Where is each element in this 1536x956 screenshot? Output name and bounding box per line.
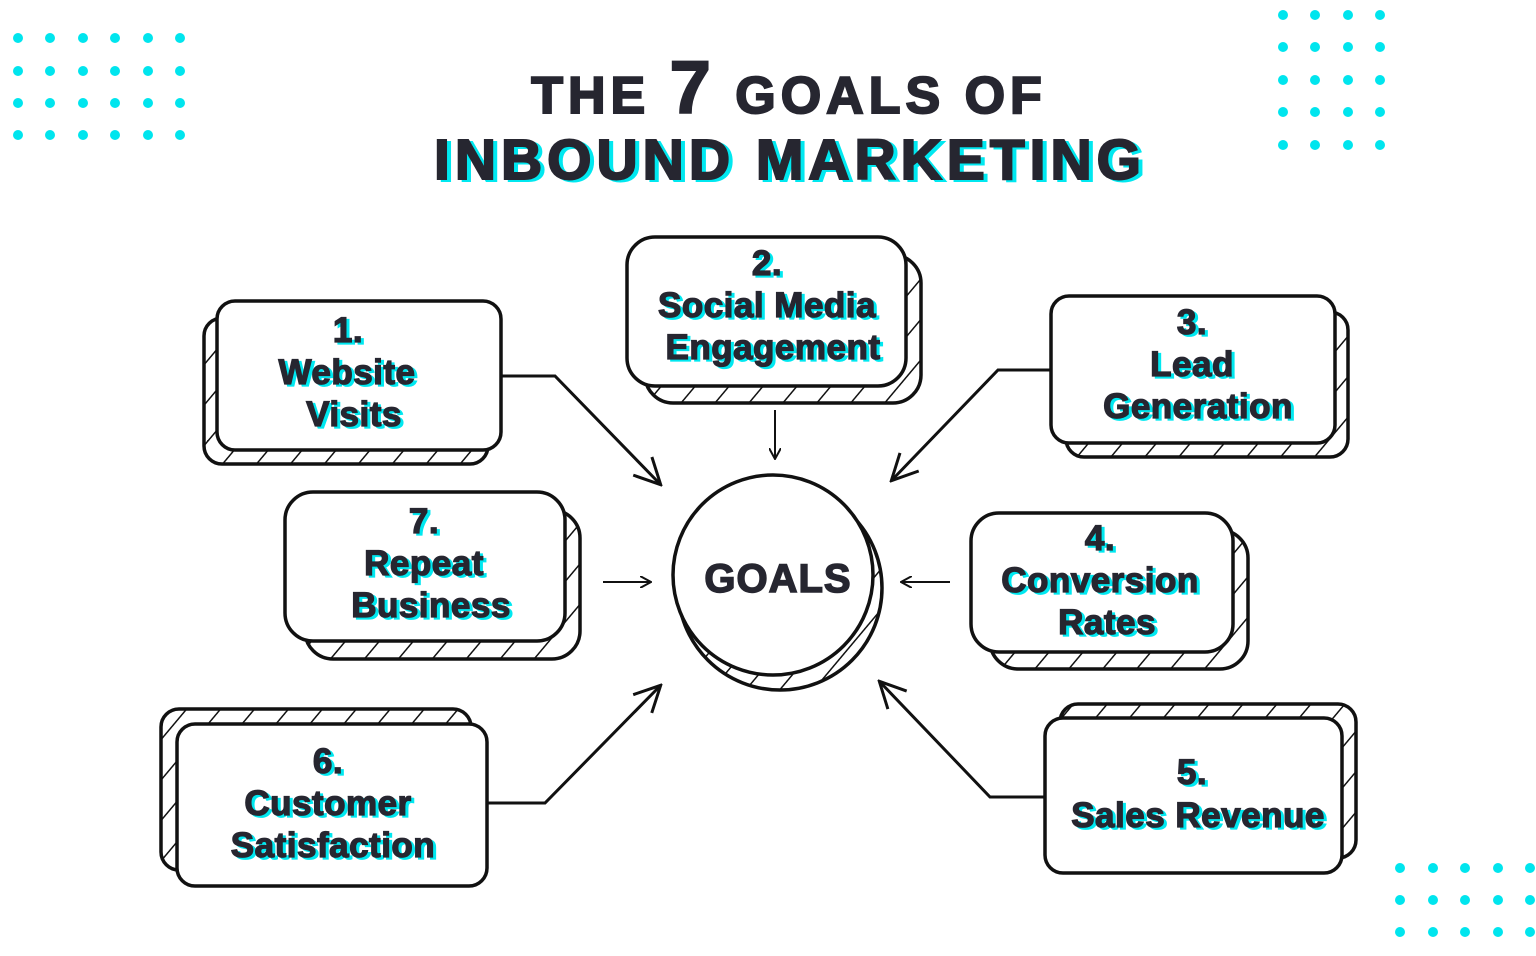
box 1: Website Visits: 1. — [336, 313, 366, 352]
box 7: Repeat Business — [285, 492, 580, 659]
box 2: Social Media Engagement: Social Media — [658, 286, 876, 325]
box 2: Social Media Engagement — [627, 237, 921, 403]
title: INBOUND MARKETING — [438, 130, 1150, 194]
box 5: Sales Revenue: Sales Revenue — [1074, 798, 1328, 837]
center circle: GOALS: GOALS — [704, 557, 852, 601]
dots: top-left — [13, 33, 185, 140]
box 3: Lead Generation: Generation — [1106, 389, 1296, 428]
box 5: Sales Revenue — [1045, 704, 1356, 873]
box 3: Lead Generation — [1051, 296, 1348, 457]
box 1: Website Visits: Visits — [306, 395, 402, 434]
box 6: Customer Satisfaction: Customer — [247, 786, 415, 825]
box 2: Social Media Engagement: Engagement — [665, 328, 881, 367]
box 3: Lead Generation: 3. — [1177, 303, 1207, 342]
box 4: Conversion Rates — [971, 513, 1248, 669]
box 1: Website Visits: Visits — [309, 397, 405, 436]
box 7: Repeat Business: Repeat — [364, 544, 484, 583]
box 6: Customer Satisfaction: 6. — [313, 742, 343, 781]
title — [434, 46, 1150, 194]
box 5: Sales Revenue: 5. — [1180, 755, 1210, 794]
box 7: Repeat Business: 7. — [412, 504, 442, 543]
title: THE 7 GOALS OF — [531, 46, 1047, 129]
box 7: Repeat Business: Business — [351, 586, 511, 625]
box 4: Conversion Rates: Rates — [1058, 603, 1156, 642]
box 3: Lead Generation: Lead — [1150, 345, 1234, 384]
box 6: Customer Satisfaction: Satisfaction — [231, 826, 435, 865]
box 1: Website Visits: Website — [278, 353, 416, 392]
dots: bottom-right — [1395, 863, 1535, 937]
box 1: Website Visits: Website — [281, 355, 419, 394]
box 4: Conversion Rates: 4. — [1088, 521, 1118, 560]
box 3: Lead Generation: Lead — [1153, 347, 1237, 386]
box 4: Conversion Rates: Conversion — [1001, 561, 1199, 600]
box 7: Repeat Business: Repeat — [367, 546, 487, 585]
arrows — [487, 370, 1051, 803]
box 6: Customer Satisfaction: 6. — [316, 744, 346, 783]
box 6: Customer Satisfaction: Satisfaction — [234, 828, 438, 867]
box 5: Sales Revenue: 5. — [1177, 753, 1207, 792]
box 7: Repeat Business: Business — [354, 588, 514, 627]
box 2: Social Media Engagement: 2. — [755, 246, 785, 285]
box 1: Website Visits: 1. — [333, 311, 363, 350]
dots: top-right — [1278, 10, 1385, 150]
box 1: Website Visits — [204, 301, 501, 464]
center circle: GOALS — [673, 475, 882, 690]
box 6: Customer Satisfaction: Customer — [244, 784, 412, 823]
box 3: Lead Generation: 3. — [1180, 305, 1210, 344]
box 7: Repeat Business: 7. — [409, 502, 439, 541]
box 4: Conversion Rates: Conversion — [1004, 563, 1202, 602]
box 2: Social Media Engagement: Engagement — [668, 330, 884, 369]
box 4: Conversion Rates: 4. — [1085, 519, 1115, 558]
title: INBOUND MARKETING — [434, 128, 1146, 192]
box 6: Customer Satisfaction — [161, 709, 487, 886]
box 4: Conversion Rates: Rates — [1061, 605, 1159, 644]
box 2: Social Media Engagement: Social Media — [661, 288, 879, 327]
box 3: Lead Generation: Generation — [1103, 387, 1293, 426]
box 5: Sales Revenue: Sales Revenue — [1071, 796, 1325, 835]
box 2: Social Media Engagement: 2. — [752, 244, 782, 283]
